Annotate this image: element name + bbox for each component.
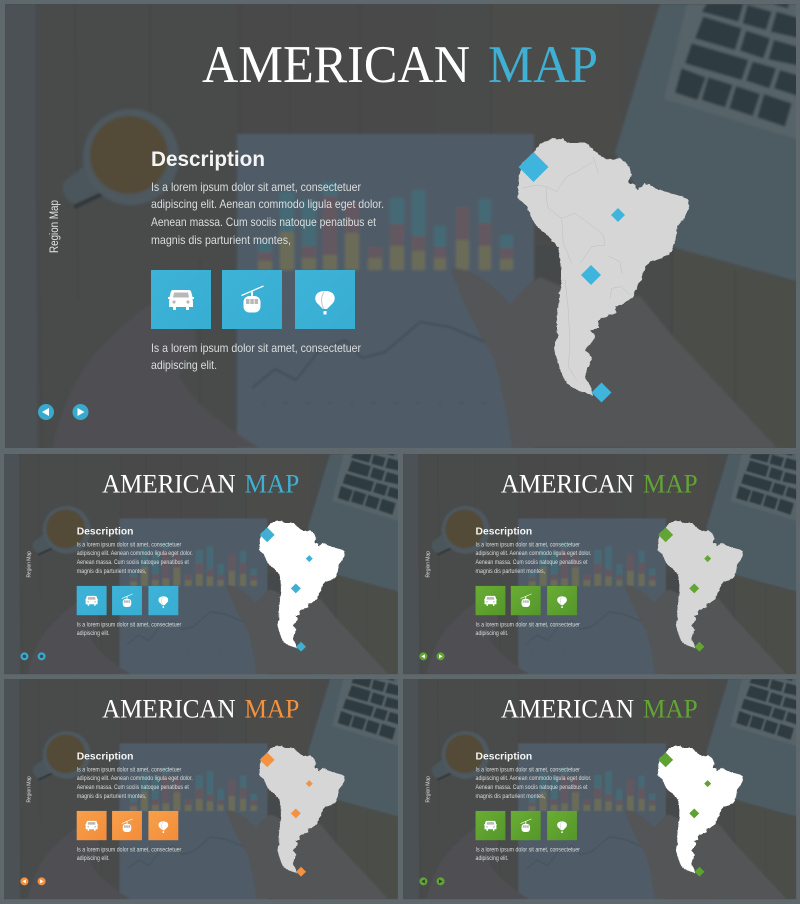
caption text bbox=[476, 623, 580, 637]
description text: adipiscing elit. Aenean commodo ligula eget dolor. bbox=[476, 776, 592, 782]
description text: Aenean massa. Cum sociis natoque penatibus et bbox=[77, 785, 189, 791]
description text: Is a lorem ipsum dolor sit amet, consectetuer bbox=[476, 768, 580, 774]
panel: large blue slide bbox=[0, 0, 800, 454]
caption text bbox=[151, 341, 361, 372]
previous button bbox=[419, 877, 427, 885]
description text bbox=[77, 543, 193, 575]
caption text bbox=[77, 848, 181, 862]
panel: small blue slide bbox=[2, 452, 400, 677]
title accent: MAP bbox=[643, 470, 698, 499]
title accent: MAP bbox=[488, 36, 598, 94]
caption text: Is a lorem ipsum dolor sit amet, consectetuer bbox=[77, 623, 181, 629]
icon: balloon bbox=[295, 270, 355, 329]
caption text bbox=[77, 623, 181, 637]
heading: Description bbox=[77, 526, 133, 537]
next button bbox=[72, 404, 88, 420]
panel: small orange slide bbox=[2, 677, 400, 902]
map markers bbox=[260, 752, 313, 877]
title: AMERICAN bbox=[202, 36, 470, 94]
description text: Aenean massa. Cum sociis natoque penatibus et bbox=[151, 215, 377, 229]
map markers bbox=[518, 152, 625, 402]
caption text: Is a lorem ipsum dolor sit amet, consectetuer bbox=[476, 623, 580, 629]
map markers bbox=[658, 752, 711, 877]
description text: Aenean massa. Cum sociis natoque penatibus et bbox=[77, 560, 189, 566]
caption text bbox=[476, 848, 580, 862]
previous button bbox=[20, 652, 28, 660]
description text: Is a lorem ipsum dolor sit amet, consectetuer bbox=[476, 543, 580, 549]
caption text: adipiscing elit. bbox=[476, 856, 509, 862]
map of South America bbox=[518, 138, 689, 395]
description text: Aenean massa. Cum sociis natoque penatibus et bbox=[476, 785, 588, 791]
next button bbox=[38, 652, 46, 660]
caption text: adipiscing elit. bbox=[77, 631, 110, 637]
panel: small green slide with white map bbox=[401, 677, 798, 902]
side label: Region Map bbox=[425, 551, 431, 578]
icon: car bbox=[476, 811, 505, 840]
description text bbox=[77, 768, 193, 800]
description text: Is a lorem ipsum dolor sit amet, consectetuer bbox=[77, 768, 181, 774]
map of South America bbox=[259, 745, 345, 873]
caption text: Is a lorem ipsum dolor sit amet, consectetuer bbox=[77, 848, 181, 854]
heading: Description bbox=[476, 751, 532, 762]
icon: balloon bbox=[547, 811, 577, 840]
next button bbox=[437, 652, 444, 660]
title accent: MAP bbox=[245, 470, 299, 499]
title accent: MAP bbox=[643, 695, 698, 724]
icon: car bbox=[151, 270, 211, 329]
side label: Region Map bbox=[425, 776, 431, 803]
caption text: Is a lorem ipsum dolor sit amet, consectetuer bbox=[476, 848, 580, 854]
icon: car bbox=[476, 586, 505, 615]
description text: magnis dis parturient montes, bbox=[77, 569, 147, 575]
caption text: adipiscing elit. bbox=[151, 358, 217, 372]
description text: Is a lorem ipsum dolor sit amet, consectetuer bbox=[77, 543, 181, 549]
description text: magnis dis parturient montes, bbox=[77, 794, 147, 800]
title: AMERICAN bbox=[102, 470, 236, 499]
description text: Aenean massa. Cum sociis natoque penatibus et bbox=[476, 560, 588, 566]
map of South America bbox=[259, 520, 345, 648]
title: AMERICAN bbox=[501, 470, 634, 499]
side label: Region Map bbox=[26, 551, 32, 578]
description text: adipiscing elit. Aenean commodo ligula eget dolor. bbox=[77, 776, 193, 782]
icon: car bbox=[77, 811, 107, 840]
icon: cable car bbox=[112, 811, 142, 840]
title: AMERICAN bbox=[501, 695, 634, 724]
heading: Description bbox=[476, 526, 532, 537]
map of South America bbox=[658, 745, 743, 873]
caption text: adipiscing elit. bbox=[77, 856, 110, 862]
description text: adipiscing elit. Aenean commodo ligula eget dolor. bbox=[77, 551, 193, 557]
description text bbox=[476, 768, 592, 800]
description text: magnis dis parturient montes, bbox=[476, 569, 545, 575]
next button bbox=[437, 877, 444, 885]
title: AMERICAN bbox=[102, 695, 236, 724]
previous button bbox=[20, 877, 28, 885]
side label: Region Map bbox=[26, 776, 32, 803]
icon: cable car bbox=[511, 811, 541, 840]
icon: cable car bbox=[112, 586, 142, 615]
map of South America bbox=[658, 520, 743, 648]
heading: Description bbox=[151, 148, 265, 171]
description text bbox=[476, 543, 592, 575]
icon: balloon bbox=[148, 586, 178, 615]
panel: small green slide bbox=[401, 452, 798, 677]
description text: magnis dis parturient montes, bbox=[151, 233, 291, 247]
description text: adipiscing elit. Aenean commodo ligula eget dolor. bbox=[151, 197, 384, 211]
caption text: adipiscing elit. bbox=[476, 631, 509, 637]
description text: adipiscing elit. Aenean commodo ligula eget dolor. bbox=[476, 551, 592, 557]
icon: balloon bbox=[148, 811, 178, 840]
map markers bbox=[658, 527, 711, 652]
description text: Is a lorem ipsum dolor sit amet, consectetuer bbox=[151, 180, 361, 194]
icon: cable car bbox=[222, 270, 282, 329]
title accent: MAP bbox=[245, 695, 299, 724]
icon: cable car bbox=[511, 586, 541, 615]
side label: Region Map bbox=[49, 200, 61, 253]
caption text: Is a lorem ipsum dolor sit amet, consectetuer bbox=[151, 341, 361, 355]
icon: car bbox=[77, 586, 107, 615]
heading: Description bbox=[77, 751, 133, 762]
description text bbox=[151, 180, 384, 247]
next button bbox=[38, 877, 46, 885]
previous button bbox=[419, 652, 427, 660]
previous button bbox=[38, 404, 54, 420]
icon: balloon bbox=[547, 586, 577, 615]
description text: magnis dis parturient montes, bbox=[476, 794, 545, 800]
map markers bbox=[260, 527, 313, 652]
